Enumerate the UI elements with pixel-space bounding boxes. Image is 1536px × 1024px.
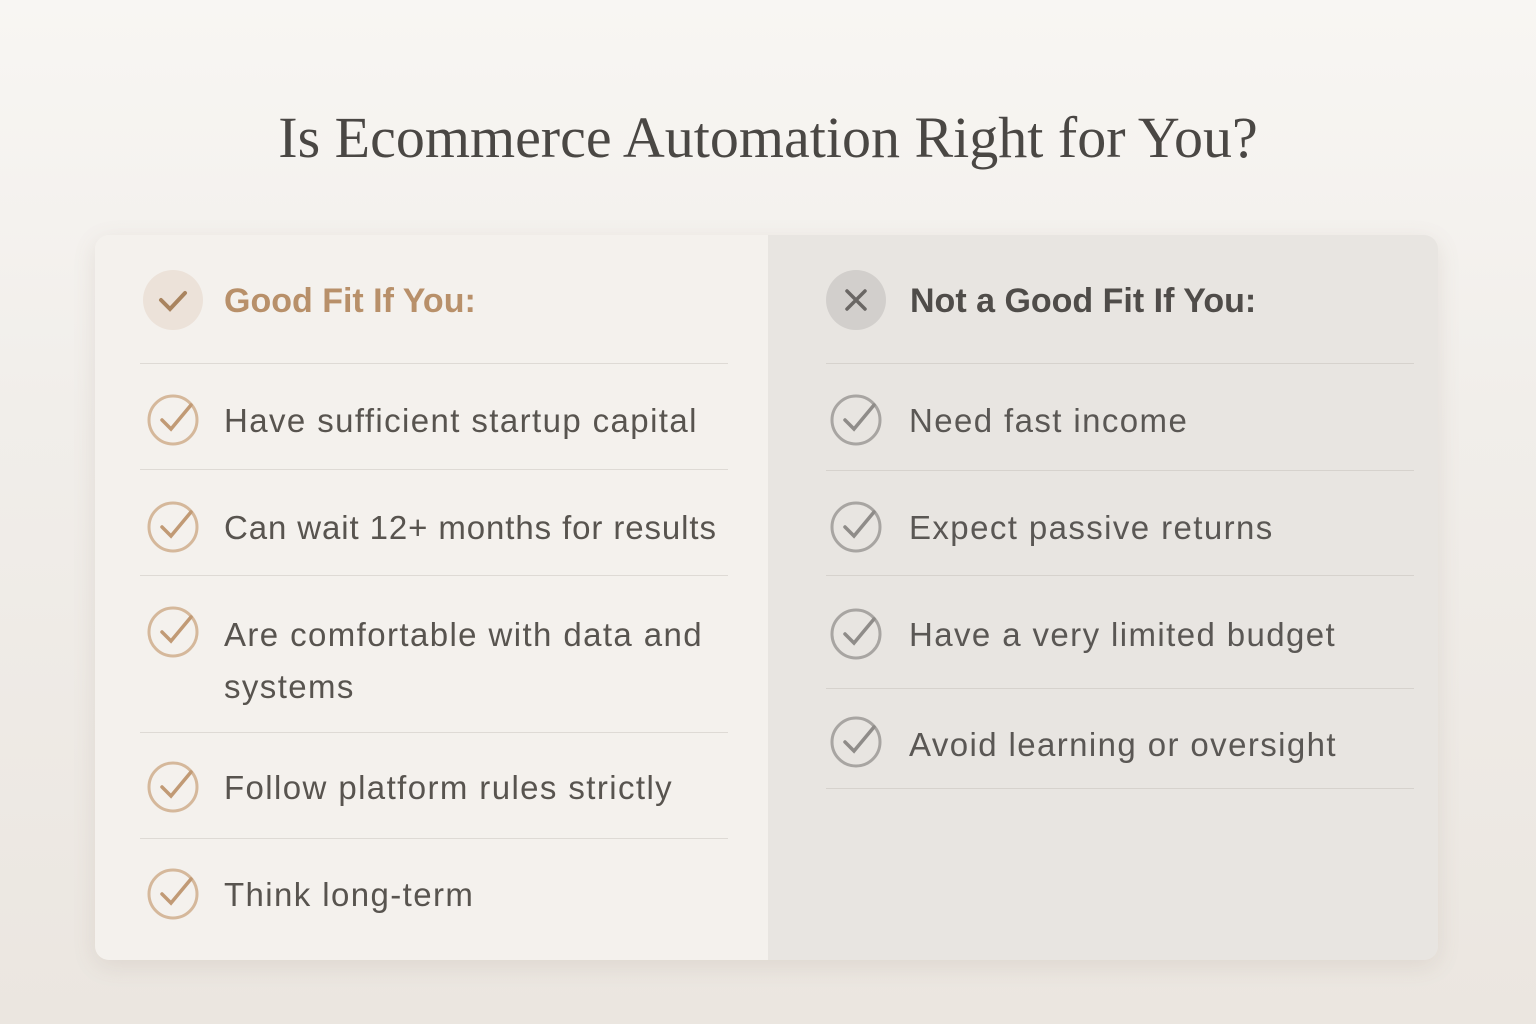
heading: not a good fit [826, 270, 1256, 330]
panel: card [95, 235, 1438, 960]
heading: good fit: Good Fit If You: [224, 282, 476, 320]
item: limited budget: Have a very limited budget [909, 616, 1336, 653]
item: data and systems: Are comfortable with data and [224, 616, 703, 653]
title: Is Ecommerce Automation Right for You? [278, 105, 1258, 170]
heading: not a good fit: Not a Good Fit If You: [910, 282, 1256, 320]
item: wait 12+ months [148, 502, 717, 552]
item: data and systems [148, 606, 703, 705]
item: platform rules: Follow platform rules strictly [224, 769, 673, 806]
heading: good fit [143, 270, 476, 330]
item: avoid learning [830, 716, 1337, 768]
item: passive returns [830, 502, 1274, 552]
panel: not a good fit [768, 235, 1438, 960]
item: sufficient capital [148, 394, 698, 446]
icon: filled check [143, 270, 203, 330]
item: long-term [148, 868, 474, 920]
item: avoid learning: Avoid learning or oversight [909, 726, 1337, 763]
item: long-term: Think long-term [224, 876, 474, 913]
item: limited budget [830, 608, 1336, 660]
item: data and systems: systems [224, 668, 355, 705]
item: fast income [830, 394, 1188, 446]
item: passive returns: Expect passive returns [909, 509, 1274, 546]
item: wait 12+ months: Can wait 12+ months for results [224, 509, 717, 546]
item: fast income: Need fast income [909, 402, 1188, 439]
panel: good fit [95, 235, 768, 960]
item: platform rules [148, 762, 673, 812]
item: sufficient capital: Have sufficient startup capital [224, 402, 698, 439]
icon: x [826, 270, 886, 330]
